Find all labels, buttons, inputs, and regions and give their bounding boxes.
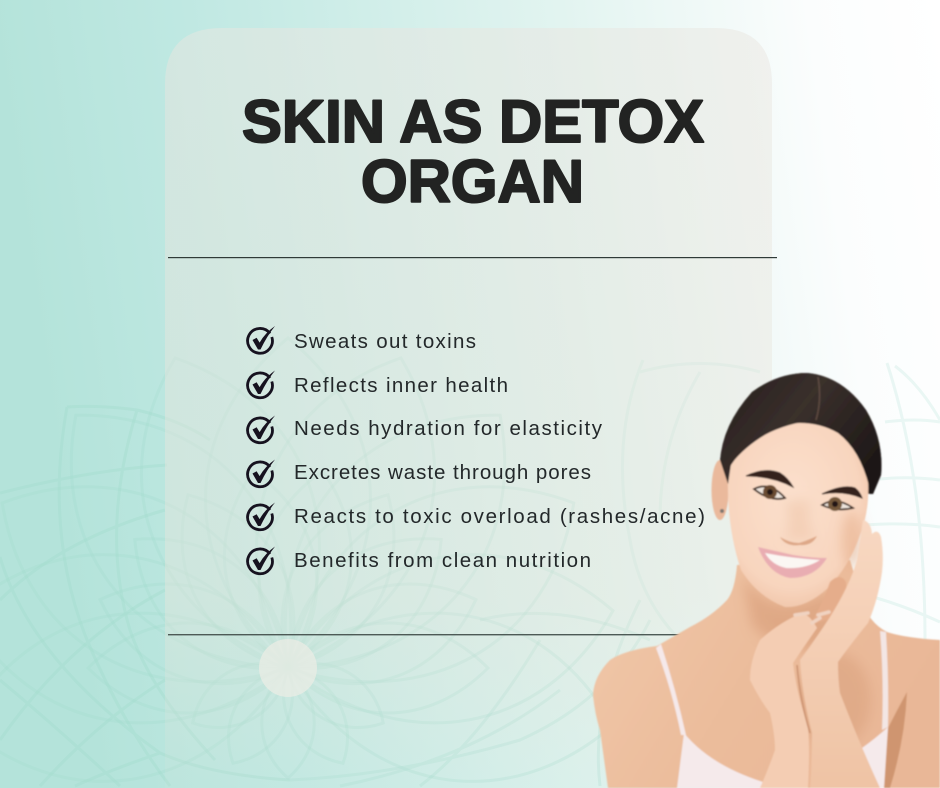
right brow: [822, 487, 862, 498]
left hand and forearm: [750, 613, 817, 788]
title: SKIN AS DETOX: [242, 88, 704, 155]
underarm shadow: [884, 692, 907, 788]
left eye: [754, 485, 785, 499]
right hand and forearm: [800, 520, 883, 788]
neck and torso: [593, 560, 940, 788]
face: [728, 420, 868, 607]
checklist: [248, 326, 705, 574]
hand crease: [797, 665, 810, 733]
neck shadow: [742, 575, 838, 650]
earring: [720, 509, 724, 513]
mouth: [758, 547, 827, 578]
bottom divider: [168, 634, 698, 635]
item: needs hydration for elasticity: Needs hydration for elasticity: [294, 417, 603, 440]
fingernails: [795, 612, 829, 623]
left strap: [656, 644, 686, 735]
title: ORGAN: [361, 148, 584, 215]
item: reflects inner health: [248, 370, 508, 398]
photo: smiling woman: [593, 373, 940, 788]
item: sweats out toxins: Sweats out toxins: [294, 330, 476, 353]
item: reacts to toxic overload: Reacts to toxic overload (rashes/acne): [294, 505, 705, 528]
camisole top: [677, 727, 888, 788]
thumb behind: [810, 577, 846, 625]
item: benefits from clean nutrition: Benefits from clean nutrition: [294, 549, 591, 572]
cheek and nose shading: [784, 500, 862, 568]
item: reflects inner health: Reflects inner health: [294, 374, 508, 397]
left brow: [746, 471, 793, 487]
item: excretes waste through pores: Excretes waste through pores: [294, 461, 591, 484]
top divider: [168, 257, 777, 258]
nose shadow: [780, 536, 817, 545]
decorative web pattern: [0, 330, 940, 788]
right strap: [880, 631, 888, 730]
title: [242, 88, 704, 215]
ear: [712, 460, 728, 520]
panel: translucent content card: [165, 28, 772, 788]
hair part: [816, 377, 820, 420]
hair back: [720, 373, 881, 494]
hair front: [720, 373, 881, 494]
item: sweats out toxins: [248, 326, 476, 353]
right eye: [822, 497, 853, 511]
chest shadow: [799, 652, 871, 748]
